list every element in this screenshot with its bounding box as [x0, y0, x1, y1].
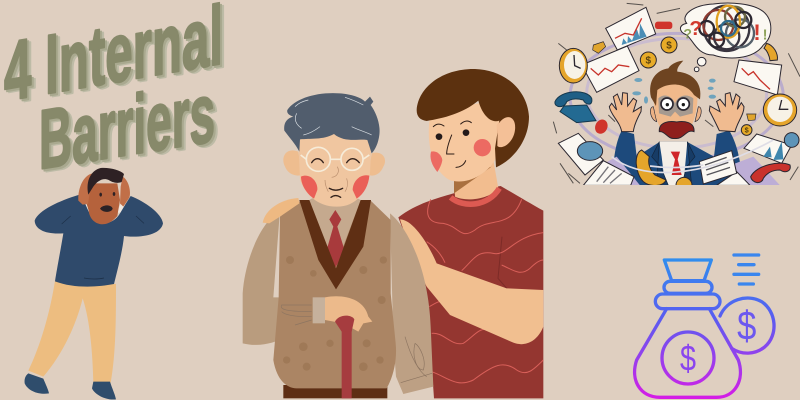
- question and exclamation marks: !: [763, 27, 768, 43]
- blue disc right: [784, 133, 799, 147]
- yellow handset lower part: [676, 176, 692, 185]
- red capsules: [593, 22, 672, 136]
- elderly man: wrinkles: [325, 167, 347, 192]
- coins: $: [646, 56, 652, 67]
- bag neck: [664, 260, 711, 281]
- carer: shirt: [398, 186, 543, 398]
- question and exclamation marks: ?: [689, 17, 702, 40]
- coins: $: [666, 41, 672, 52]
- carer: neck: [454, 160, 498, 199]
- lower papers: [583, 161, 634, 185]
- businessman: mouth: [659, 122, 694, 139]
- carer: ear over hair: [497, 117, 515, 147]
- question and exclamation marks: [684, 21, 766, 40]
- elderly man: ears: [283, 150, 385, 176]
- elderly man: sleeve creases: [401, 337, 432, 383]
- icon: money bags: [635, 255, 774, 397]
- carer: arm: [400, 219, 543, 344]
- whirl lines in front: [612, 140, 773, 172]
- blue pie chart: [577, 142, 603, 160]
- elderly man: tie: [327, 210, 345, 267]
- illustration: younger carer and elderly man: [243, 69, 543, 398]
- carer: face details: [433, 121, 471, 167]
- elderly man: vest pattern: [283, 256, 387, 371]
- title: 4 Internal Barriers: [4, 0, 227, 190]
- side coin: [720, 298, 774, 353]
- carer: sleeve seam: [498, 237, 507, 288]
- businessman: neck and head: [654, 84, 698, 140]
- businessman: hair: [650, 61, 700, 106]
- rising chart sheet: [606, 7, 656, 50]
- carer: cheeks: [474, 139, 491, 156]
- elderly man: hand on cane: [325, 296, 372, 332]
- neck gap highlights: [76, 202, 132, 213]
- elderly man: shoulder hand: [263, 198, 299, 223]
- coins: [640, 37, 752, 135]
- lavender shadows: [598, 157, 780, 185]
- small gold pieces: [593, 42, 756, 121]
- businessman: right hand: [709, 93, 744, 132]
- elderly man: face details: [312, 159, 359, 197]
- businessman: lapels: [652, 142, 695, 185]
- motion strokes: [553, 3, 800, 183]
- elderly man: vest: [273, 200, 396, 388]
- arm creases: [62, 216, 144, 279]
- whirl lines: [570, 33, 783, 160]
- elderly man: cuff: [313, 297, 325, 323]
- elderly man: cheeks: [301, 176, 317, 199]
- businessman: ears: [650, 107, 701, 122]
- bag dollar sign: $: [680, 338, 696, 378]
- speed lines: [734, 255, 759, 284]
- carer: hair: [417, 69, 529, 167]
- title: 4 Internal Barriers: Barriers: [43, 67, 219, 190]
- illustration: worried man holding his head: [25, 168, 163, 400]
- bag body: [635, 309, 740, 397]
- businessman: shirt: [659, 142, 687, 185]
- clock right: [763, 94, 797, 126]
- bar chart sheet right: [744, 134, 792, 163]
- tangled scribble: [699, 6, 754, 51]
- thought bubble: [680, 3, 771, 58]
- yellow handset top right: [764, 43, 777, 61]
- sweat drops: [632, 78, 716, 104]
- document lines: [705, 157, 730, 175]
- shoes: [25, 373, 116, 400]
- sweater: [35, 195, 163, 287]
- businessman: eyes: [661, 98, 689, 110]
- elderly man: far sleeve: [390, 213, 433, 394]
- blue telephone: [555, 92, 596, 123]
- businessman: jacket: [613, 131, 742, 185]
- businessman: eye bags: [658, 96, 693, 117]
- carer: shirt wave pattern: [427, 199, 543, 383]
- bag dollar coin: [662, 332, 714, 384]
- eyes and mouth: [99, 192, 115, 197]
- elderly man: hair: [284, 93, 380, 153]
- side dollar sign: $: [737, 303, 756, 348]
- elderly man: glasses: [301, 147, 369, 171]
- elderly man: hair highlights: [295, 97, 372, 135]
- question and exclamation marks: ?: [683, 25, 692, 41]
- businessman: tie: [671, 152, 682, 175]
- falling chart sheet right: [734, 60, 782, 95]
- businessman: left hand: [609, 93, 641, 132]
- title: 4 Internal Barriers: Barriers: [41, 66, 217, 189]
- hands: [78, 173, 130, 207]
- carer: head: [429, 100, 502, 182]
- title: 4 Internal Barriers: Barriers: [39, 64, 215, 187]
- falling chart sheet left: [582, 46, 639, 92]
- elderly man: cane handle: [335, 316, 354, 332]
- elderly man: sleeve cuff creases: [281, 305, 312, 325]
- coins: $: [745, 126, 749, 135]
- elderly man: shirt: [309, 192, 361, 268]
- hair: [88, 168, 124, 195]
- question and exclamation marks: !: [753, 20, 761, 45]
- elderly man: belt: [283, 385, 387, 398]
- carer: ear: [497, 117, 515, 147]
- document near jacket: [699, 151, 737, 184]
- clock left: [559, 48, 587, 83]
- neck and face: [86, 183, 120, 224]
- elderly man: head: [298, 123, 372, 207]
- elderly man: cane: [342, 327, 352, 398]
- red handset: [751, 163, 790, 183]
- elderly man: vest collar: [299, 200, 371, 289]
- illustration: overwhelmed businessman in a whirl of clutter: [553, 3, 800, 193]
- trousers: [28, 281, 116, 383]
- yellow handset: [636, 150, 666, 185]
- elderly man: near sleeve: [243, 210, 313, 345]
- paper stack left: [558, 133, 603, 175]
- bag ties: [664, 281, 712, 293]
- carer: collar: [451, 188, 499, 204]
